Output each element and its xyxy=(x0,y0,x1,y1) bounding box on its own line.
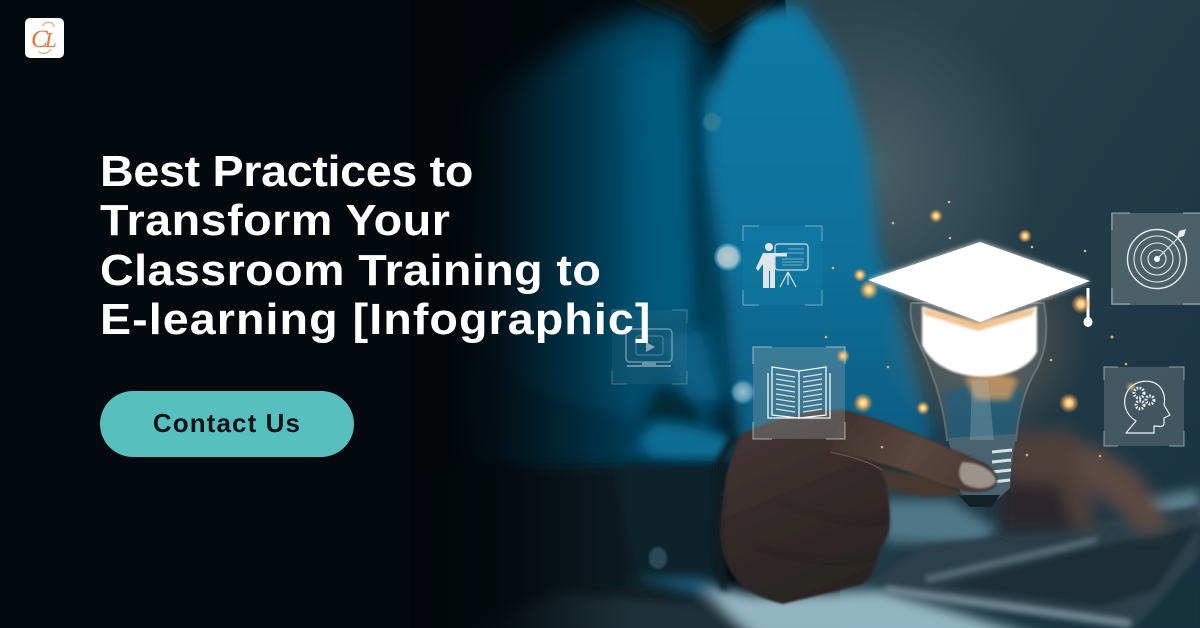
call to action button xyxy=(100,391,354,457)
wall xyxy=(785,0,1200,628)
icon tile: video lesson monitor xyxy=(612,310,688,384)
title: Classroom Training to xyxy=(100,246,601,295)
laptop xyxy=(870,505,1200,628)
soft bokeh dots on shirt xyxy=(649,113,756,569)
logo xyxy=(25,18,64,58)
blurred right hand xyxy=(1000,428,1170,536)
title: Transform Your xyxy=(100,196,450,245)
title xyxy=(100,147,651,344)
logo: L xyxy=(44,28,57,52)
graduation cap xyxy=(868,242,1092,327)
cuff and lower dark sleeve xyxy=(400,465,735,628)
title: E-learning [Infographic] xyxy=(100,295,651,344)
icon tile: teacher at board xyxy=(742,226,822,306)
logo: C xyxy=(31,26,48,53)
call to action button: Contact Us xyxy=(153,408,301,438)
sparkles xyxy=(825,201,1137,457)
light bulb xyxy=(880,235,1090,507)
icon tile: target with arrow xyxy=(1111,212,1200,305)
shirt xyxy=(470,10,740,470)
title: Best Practices to xyxy=(100,147,473,196)
icon tile: head with gears xyxy=(1104,366,1184,446)
sleeve xyxy=(470,330,735,490)
icon tile: open book xyxy=(752,346,846,440)
hand holding bulb xyxy=(715,410,997,604)
desk xyxy=(440,488,1200,628)
